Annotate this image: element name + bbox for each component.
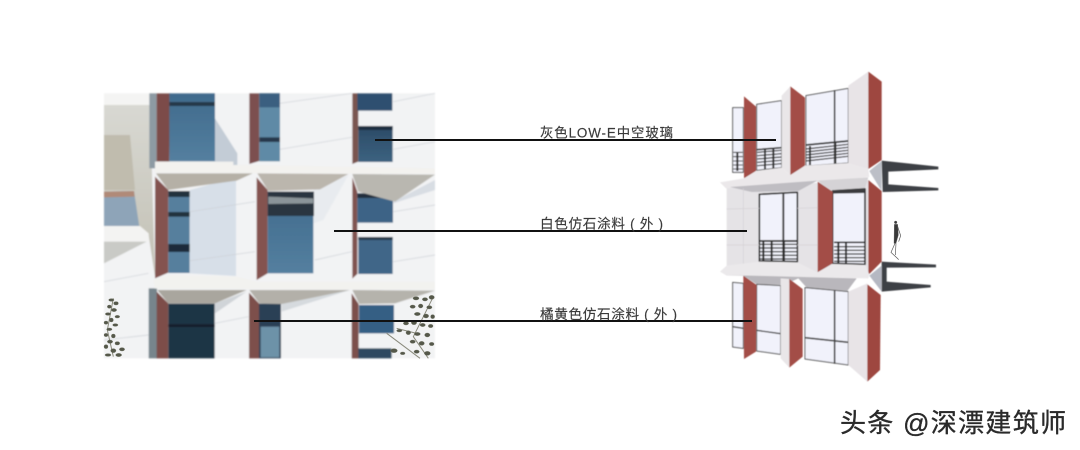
lower slab: [720, 262, 869, 278]
label: white coating: 白色仿石涂料 ( 外 ): [540, 216, 663, 232]
facade diagram: [720, 72, 938, 382]
label: orange coating: 橘黄色仿石涂料 ( 外 ): [540, 306, 677, 322]
tree left: [104, 298, 125, 357]
person: [891, 221, 901, 260]
leader line: glass: [375, 139, 776, 141]
middle windows: [759, 192, 797, 262]
leader line: white coating: [334, 230, 747, 232]
tree right: [387, 295, 435, 358]
top row: [733, 72, 882, 178]
middle railings: [760, 241, 865, 263]
top railings: [733, 141, 848, 171]
middle wall: [727, 180, 868, 274]
cantilever slabs: [882, 161, 938, 292]
bottom row: [733, 276, 881, 382]
photo: building facade: [104, 93, 435, 358]
label: glass: 灰色LOW-E中空玻璃: [540, 124, 673, 140]
watermark: 头条 @深漂建筑师: [840, 408, 1066, 438]
leader line: orange coating: [254, 320, 752, 322]
middle slab: [720, 163, 869, 188]
slab end caps: [869, 161, 882, 191]
